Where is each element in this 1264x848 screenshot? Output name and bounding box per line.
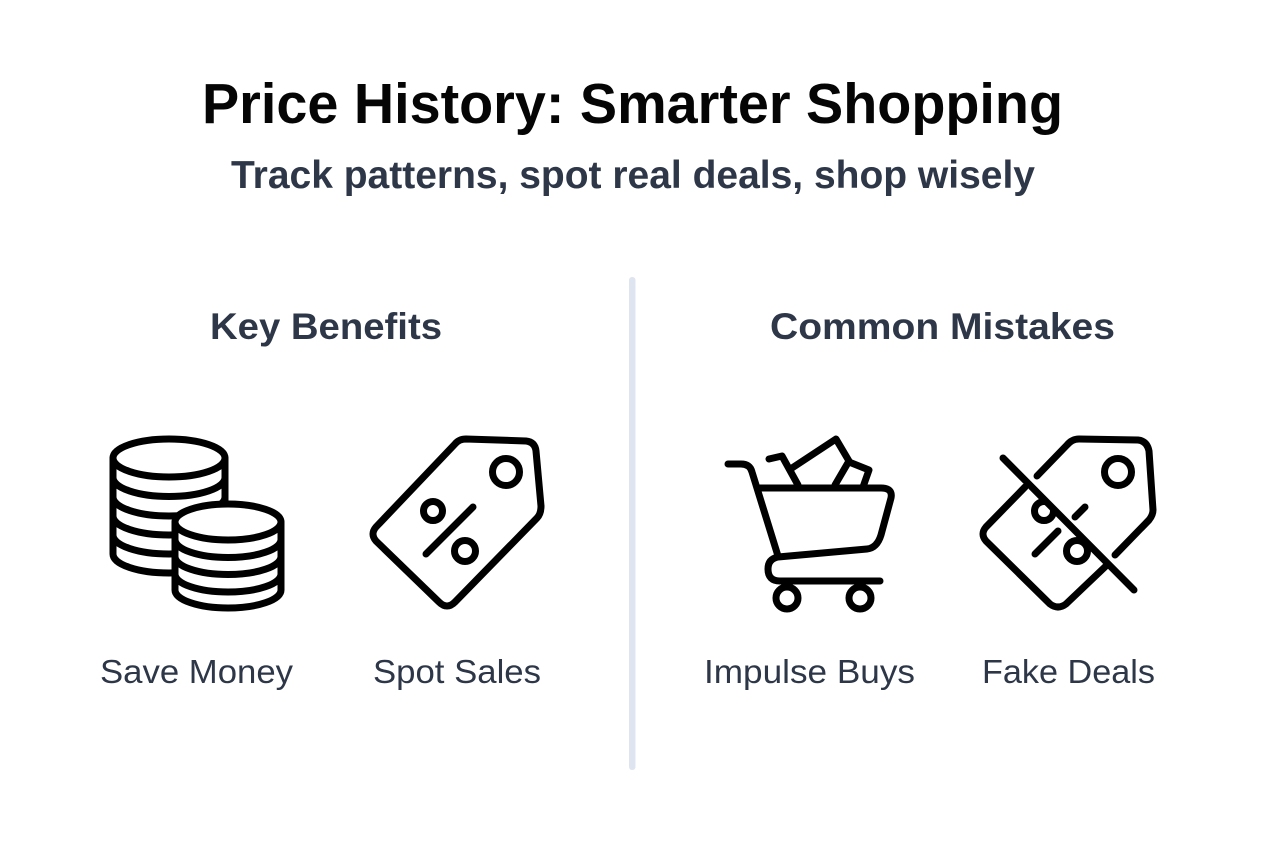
icon: stacked coins xyxy=(113,439,281,608)
label: save money: Save Money xyxy=(100,653,294,690)
center divider xyxy=(629,277,636,770)
panel: key benefits xyxy=(100,306,541,690)
icon: percent price tag xyxy=(373,439,541,606)
label: fake deals: Fake Deals xyxy=(982,653,1155,690)
icon: shopping cart xyxy=(728,439,891,609)
label: impulse buys: Impulse Buys xyxy=(704,653,915,690)
subtitle: Track patterns, spot real deals, shop wisely xyxy=(231,154,1035,197)
heading: key benefits: Key Benefits xyxy=(210,306,442,347)
icon: crossed-out price tag xyxy=(983,439,1153,607)
panel: common mistakes xyxy=(704,306,1155,690)
heading: common mistakes: Common Mistakes xyxy=(770,306,1115,347)
title: Price History: Smarter Shopping xyxy=(202,72,1063,136)
label: spot sales: Spot Sales xyxy=(373,653,541,690)
